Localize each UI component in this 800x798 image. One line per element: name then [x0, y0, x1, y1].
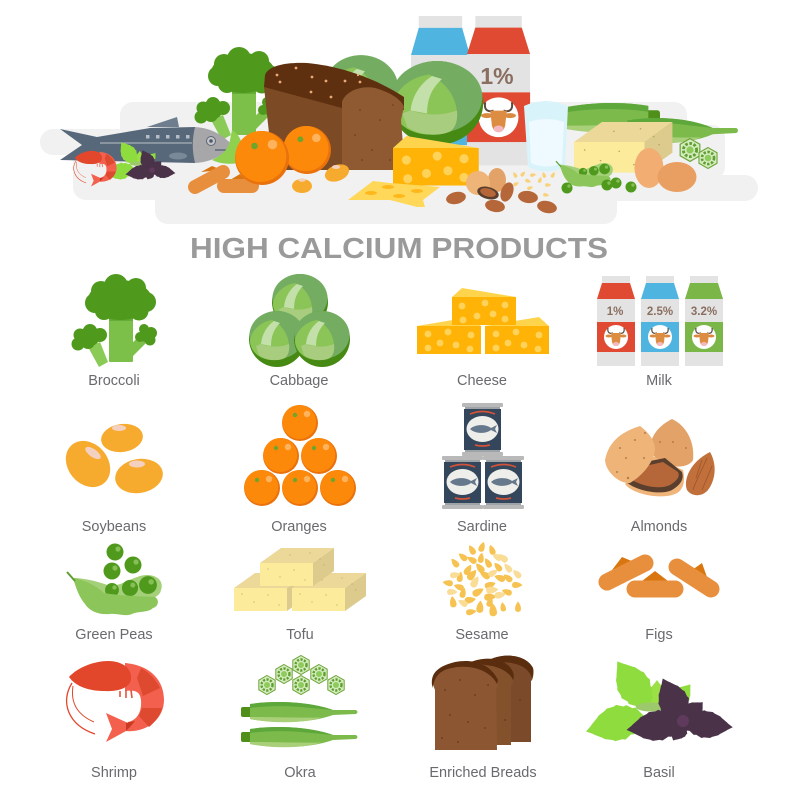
hero front cabbage — [391, 61, 483, 145]
icon: milk cartons: 2.5% — [647, 306, 673, 318]
item: enriched breads — [429, 656, 537, 781]
item: almonds — [605, 419, 715, 535]
item: cheese — [417, 288, 549, 389]
hero green pea pod — [556, 161, 613, 187]
label: cheese: Cheese — [457, 373, 507, 389]
icon: green peas — [67, 544, 162, 615]
title: HIGH CALCIUM PRODUCTS — [190, 233, 608, 265]
hero oranges — [235, 126, 331, 185]
icon: broccoli — [72, 274, 157, 367]
item: tofu — [234, 548, 366, 643]
label: milk: Milk — [646, 373, 673, 389]
item: soybeans — [57, 421, 166, 535]
icon: milk cartons: 3.2% — [691, 306, 717, 318]
hero okra slices — [680, 139, 717, 168]
icon: milk cartons — [597, 276, 723, 366]
label: okra: Okra — [284, 765, 317, 781]
label: green peas: Green Peas — [75, 627, 153, 643]
item: broccoli — [72, 274, 157, 389]
icon: almonds — [605, 419, 715, 496]
icon: figs — [607, 557, 711, 589]
hero broccoli — [194, 47, 280, 140]
icon: milk cartons: 1% — [607, 306, 623, 318]
icon: okra — [241, 656, 358, 747]
item: cabbage — [249, 274, 350, 389]
hero grey background blob — [40, 102, 758, 224]
icon: oranges — [244, 405, 356, 506]
hero glass of milk — [524, 101, 568, 172]
hero red milk carton — [467, 16, 530, 165]
icon: sardine cans — [442, 403, 524, 509]
hero loose peas — [561, 177, 637, 194]
icon: soybeans — [57, 421, 166, 497]
hero cheese slice — [348, 181, 440, 207]
label: almonds: Almonds — [631, 519, 687, 535]
label: sesame: Sesame — [455, 627, 509, 643]
hero sesame seeds — [512, 170, 556, 197]
label: sardine: Sardine — [457, 519, 507, 535]
hero broccoli leaf patch — [212, 130, 242, 164]
hero figs — [195, 166, 252, 187]
item: milk — [597, 276, 723, 389]
hero food illustration — [40, 16, 758, 224]
item: oranges — [244, 405, 356, 535]
label: tofu: Tofu — [286, 627, 314, 643]
item: figs — [607, 557, 711, 643]
hero shrimp — [74, 151, 117, 186]
item: sesame — [442, 541, 523, 643]
hero almonds — [445, 168, 558, 215]
icon: shrimp — [67, 661, 164, 742]
label: basil: Basil — [643, 765, 675, 781]
icon: bread slices — [432, 656, 533, 750]
label: enriched breads: Enriched Breads — [429, 765, 537, 781]
label: broccoli: Broccoli — [88, 373, 140, 389]
item: sardine — [442, 403, 524, 535]
hero cheese block — [393, 136, 479, 186]
hero red milk carton: 1% — [480, 63, 514, 89]
hero bread loaf — [264, 63, 405, 170]
hero basil — [104, 138, 176, 183]
hero eggs — [634, 148, 696, 192]
label: shrimp: Shrimp — [91, 765, 137, 781]
item: shrimp — [67, 661, 164, 781]
label: oranges: Oranges — [271, 519, 327, 535]
hero fish — [60, 117, 232, 163]
icon: cheese — [417, 288, 549, 354]
hero soybeans — [292, 161, 351, 193]
hero tofu — [574, 122, 672, 173]
hero blue milk carton — [411, 16, 470, 169]
icon: sesame seeds — [442, 541, 523, 617]
label: soybeans: Soybeans — [82, 519, 146, 535]
item: okra — [241, 656, 358, 781]
hero okra pods — [509, 103, 738, 143]
icon: basil — [581, 652, 734, 749]
item: basil — [581, 652, 734, 781]
hero back cabbage — [323, 55, 399, 131]
item: green peas — [67, 544, 162, 643]
label: figs: Figs — [645, 627, 673, 643]
icon: cabbage — [249, 274, 350, 367]
icon: tofu — [234, 548, 366, 611]
label: cabbage: Cabbage — [270, 373, 328, 389]
